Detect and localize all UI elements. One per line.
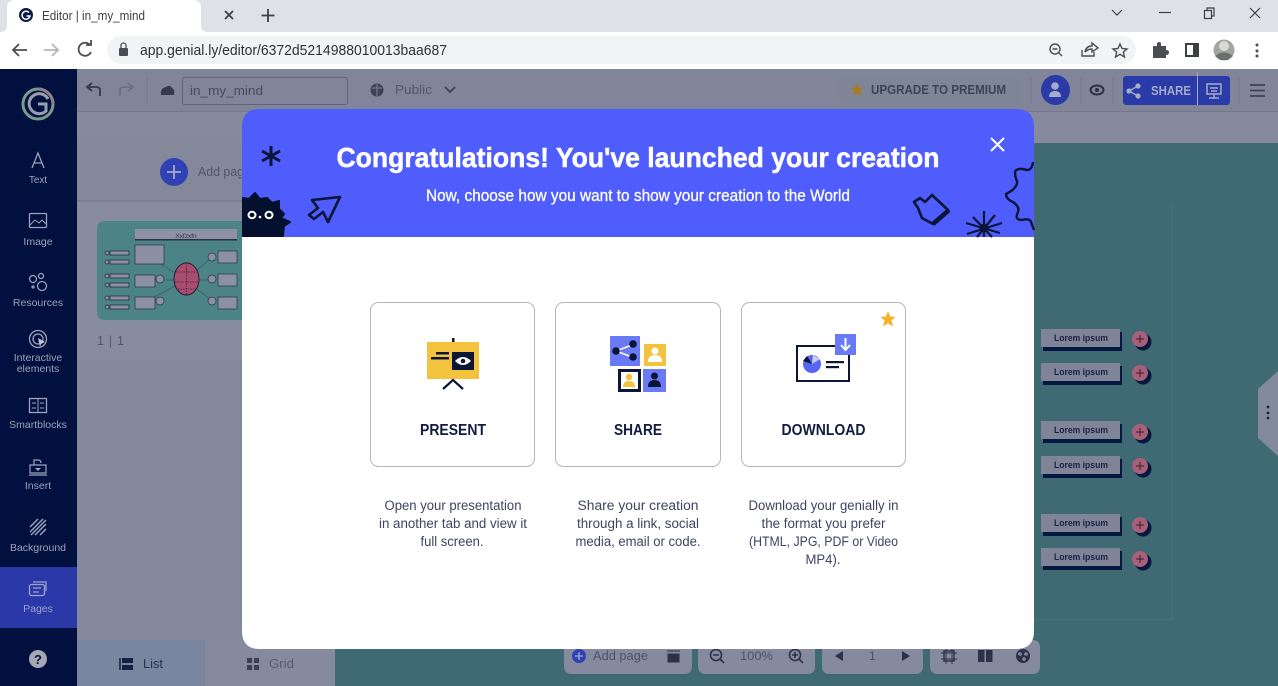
text tool bbox=[29, 153, 47, 186]
interactive elements tool: elements bbox=[17, 363, 59, 375]
monster decoration bbox=[243, 193, 290, 236]
thumbnail left nodes bbox=[135, 245, 164, 309]
share option card bbox=[556, 302, 720, 466]
upgrade to premium button bbox=[838, 78, 1021, 103]
right-side lorem ipsum buttons bbox=[1041, 329, 1152, 570]
download description: MP4). bbox=[806, 552, 840, 567]
zoom group: 100% bbox=[740, 649, 773, 663]
thumbnail title bar: Xxfzxfn bbox=[175, 233, 197, 240]
lorem button 2: Lorem ipsum bbox=[1054, 367, 1108, 377]
grid tab: Grid bbox=[269, 657, 294, 671]
lorem button 1 bbox=[1041, 329, 1152, 351]
zoom group bbox=[698, 640, 815, 674]
file name input bbox=[182, 78, 348, 104]
smartblocks tool: Smartblocks bbox=[9, 419, 67, 431]
preview eye icon bbox=[1090, 86, 1104, 94]
pages tool, active: Pages bbox=[23, 603, 53, 615]
download label: DOWNLOAD bbox=[782, 422, 866, 439]
add page and delete group: Add page bbox=[593, 649, 648, 663]
insert tool bbox=[25, 460, 51, 492]
list tab: List bbox=[143, 657, 164, 671]
bottom toolbar bbox=[564, 640, 1040, 674]
download description bbox=[748, 498, 898, 567]
genially logo bbox=[23, 89, 53, 119]
left sidebar bbox=[0, 69, 77, 686]
background tool: Background bbox=[10, 542, 66, 554]
add page and delete group bbox=[564, 640, 692, 674]
download description: (HTML, JPG, PDF or Video bbox=[749, 534, 898, 549]
lorem button 3: Lorem ipsum bbox=[1054, 425, 1108, 435]
undo redo icons bbox=[87, 83, 133, 96]
lorem button 4 bbox=[1041, 456, 1152, 478]
page thumbnail bbox=[97, 221, 242, 320]
icon: download document bbox=[797, 334, 856, 381]
squiggle decoration bbox=[1006, 162, 1034, 230]
present label: PRESENT bbox=[420, 422, 486, 439]
smartblocks tool bbox=[9, 398, 67, 431]
present option card bbox=[370, 302, 534, 466]
address bar bbox=[107, 36, 1136, 64]
thumbnail title bar bbox=[135, 229, 237, 240]
lorem button 6 bbox=[1041, 548, 1152, 570]
canvas area bbox=[335, 143, 1278, 686]
grid tab bbox=[205, 640, 335, 686]
download description: the format you prefer bbox=[762, 516, 886, 531]
download description: Download your genially in bbox=[748, 498, 898, 513]
present description: full screen. bbox=[420, 534, 484, 549]
active browser tab: Editor | in_my_mind bbox=[42, 9, 145, 23]
share description bbox=[576, 498, 700, 549]
lorem button 5 bbox=[1041, 514, 1152, 536]
close icon bbox=[991, 138, 1004, 151]
help icon: ? bbox=[34, 652, 42, 667]
share and present button bbox=[1123, 72, 1230, 105]
active browser tab bbox=[0, 0, 233, 32]
invite user button bbox=[1041, 75, 1070, 105]
upgrade to premium button: UPGRADE TO PREMIUM bbox=[871, 83, 1006, 97]
modal subtitle: Now, choose how you want to show your creation to the World bbox=[426, 187, 850, 205]
interactive elements tool: Interactive bbox=[14, 352, 62, 364]
share label: SHARE bbox=[614, 422, 662, 439]
browser action icons bbox=[1050, 43, 1127, 57]
page number: 1 | 1 bbox=[97, 334, 124, 348]
lorem button 1: Lorem ipsum bbox=[1054, 333, 1108, 343]
pages tool, active bbox=[0, 567, 77, 628]
insert tool: Insert bbox=[25, 480, 51, 492]
cloud saved icon bbox=[161, 86, 174, 95]
share description: media, email or code. bbox=[576, 534, 700, 549]
lorem button 2 bbox=[1041, 363, 1152, 385]
icon: presentation board bbox=[427, 338, 479, 389]
navigation buttons bbox=[13, 40, 91, 56]
thumbnail right nodes bbox=[208, 251, 237, 309]
browser tab bar bbox=[0, 0, 1278, 33]
extensions icon bbox=[1153, 42, 1169, 58]
interactive elements tool bbox=[14, 330, 62, 375]
download option card bbox=[742, 302, 906, 466]
paper plane arrow decoration bbox=[309, 197, 340, 222]
resources tool bbox=[13, 274, 63, 309]
starburst decoration bbox=[966, 211, 1002, 237]
window controls bbox=[1112, 8, 1260, 18]
icon: share grid bbox=[610, 336, 666, 392]
present description: in another tab and view it bbox=[379, 516, 527, 531]
share description: through a link, social bbox=[577, 516, 699, 531]
thumbnail brain bbox=[147, 255, 212, 301]
asterisk decoration bbox=[262, 146, 280, 166]
image tool: Image bbox=[23, 236, 53, 248]
modal header bbox=[242, 109, 1034, 237]
file name input: in_my_mind bbox=[190, 83, 263, 98]
share and present button: SHARE bbox=[1151, 84, 1191, 98]
background tool bbox=[10, 519, 66, 554]
page navigation group: 1 bbox=[869, 649, 876, 663]
lorem button 5: Lorem ipsum bbox=[1054, 518, 1108, 528]
hamburger menu bbox=[1250, 85, 1265, 96]
modal dialog bbox=[242, 109, 1034, 649]
profile avatar bbox=[1214, 40, 1234, 60]
present description: Open your presentation bbox=[384, 498, 522, 513]
visibility selector: Public bbox=[395, 82, 433, 97]
address bar: app.genial.ly/editor/6372d5214988010013baa687 bbox=[140, 43, 447, 59]
add page button bbox=[160, 158, 244, 186]
modal title: Congratulations! You've launched your creation bbox=[336, 142, 940, 173]
browser menu dots bbox=[1256, 44, 1258, 58]
resources tool: Resources bbox=[13, 297, 63, 309]
help icon bbox=[29, 650, 47, 668]
editor top bar bbox=[0, 69, 1278, 143]
text tool: Text bbox=[29, 175, 47, 186]
visibility selector bbox=[370, 82, 455, 97]
add page button: Add pag bbox=[198, 164, 244, 179]
thumbnail far-left labels bbox=[105, 251, 129, 309]
lorem button 3 bbox=[1041, 421, 1152, 444]
pointing hand decoration bbox=[914, 195, 949, 224]
present description bbox=[379, 498, 527, 549]
lorem button 4: Lorem ipsum bbox=[1054, 460, 1108, 470]
right panel handle bbox=[1258, 371, 1278, 456]
modal body bbox=[242, 230, 1034, 649]
image tool bbox=[23, 214, 53, 248]
left pages panel bbox=[77, 143, 335, 686]
lorem button 6: Lorem ipsum bbox=[1054, 552, 1108, 562]
new tab button bbox=[262, 9, 274, 22]
view tools group bbox=[930, 640, 1040, 674]
side panel icon bbox=[1186, 44, 1198, 56]
share description: Share your creation bbox=[578, 498, 698, 513]
icon: premium star bbox=[880, 311, 896, 326]
browser toolbar bbox=[0, 32, 1278, 69]
list tab bbox=[77, 640, 205, 686]
page navigation group bbox=[822, 640, 923, 674]
